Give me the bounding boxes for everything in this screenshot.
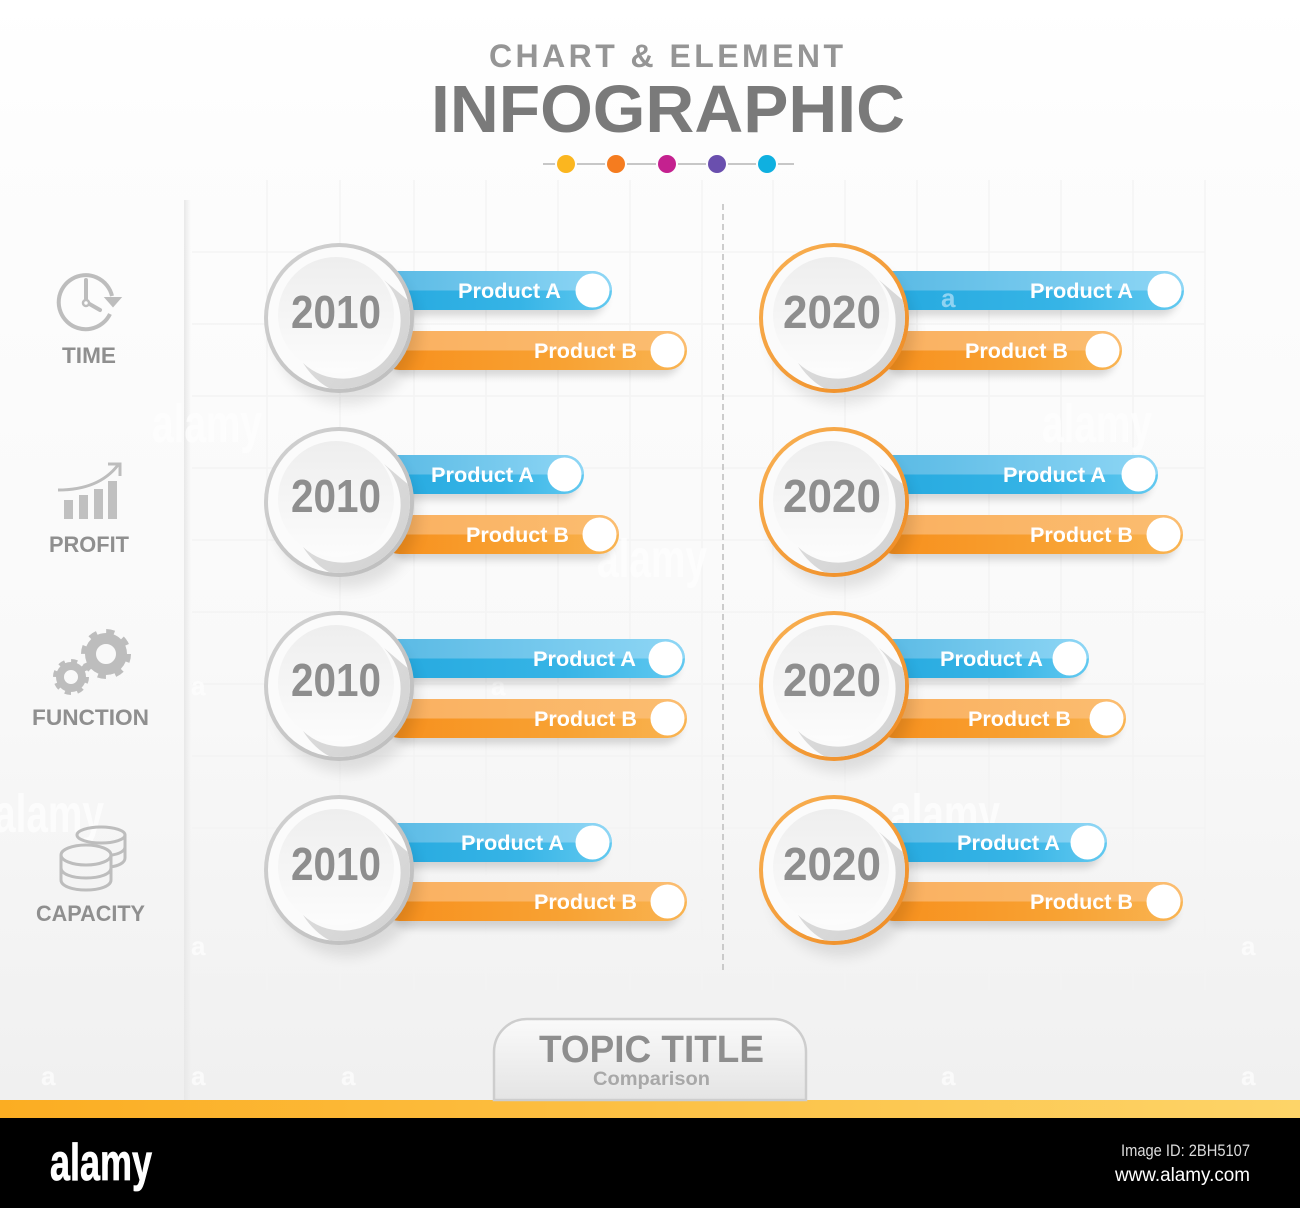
footer band: alamy [50, 1134, 152, 1192]
bar: product B: Product B [965, 340, 1068, 363]
bar: product A [380, 455, 584, 500]
bar: product B: Product B [534, 891, 637, 914]
bar: product A [875, 639, 1089, 684]
topic title tab [494, 1019, 806, 1100]
title: chart and element: CHART & ELEMENT [489, 38, 843, 74]
bar: product A [380, 639, 685, 684]
bar: product B [380, 331, 687, 376]
year badge: 2020 [783, 470, 881, 522]
panel: 2010 row 4 [264, 795, 687, 965]
year badge: 2020 [783, 286, 881, 338]
footer band: Image ID: 2BH5107 [1121, 1141, 1250, 1160]
bar: product B [380, 882, 687, 928]
year badge: 2020 [783, 838, 881, 890]
year badge [264, 611, 423, 781]
text: a [491, 671, 506, 701]
bar: product A [875, 271, 1184, 316]
text: a [941, 1061, 956, 1091]
icon: gears [56, 632, 128, 692]
text: a [41, 1061, 56, 1091]
bottom orange strip [0, 1100, 1300, 1118]
label: profit: PROFIT [49, 532, 130, 557]
icon: coins [61, 827, 125, 890]
bar: product A: Product A [431, 464, 534, 487]
panel: 2020 row 1 [759, 243, 1184, 413]
text: alamy [890, 784, 1000, 844]
year badge [264, 243, 423, 413]
bar: product B: Product B [466, 524, 569, 547]
footer band: www.alamy.com [1114, 1165, 1250, 1186]
bar: product A [380, 271, 612, 316]
bar: product B [380, 699, 687, 744]
year badge [759, 795, 918, 965]
bar: product A: Product A [957, 832, 1060, 855]
colored dots divider [543, 153, 794, 175]
year badge [264, 427, 423, 597]
bar: product B: Product B [1030, 891, 1133, 914]
panel: 2010 row 1 [264, 243, 687, 413]
year badge: 2010 [291, 654, 381, 706]
title: infographic: INFOGRAPHIC [431, 72, 905, 147]
panel: 2010 row 2 [264, 427, 619, 597]
text: a [1241, 1061, 1256, 1091]
bar: product A: Product A [533, 648, 636, 671]
panel: 2020 row 3 [759, 611, 1126, 781]
year badge: 2010 [291, 470, 381, 522]
text: alamy [1042, 394, 1152, 454]
year badge: 2010 [291, 838, 381, 890]
bar: product B [875, 699, 1126, 744]
text: a [191, 931, 206, 961]
text: a [1241, 931, 1256, 961]
label: function: FUNCTION [32, 705, 149, 730]
topic title tab: TOPIC TITLE [539, 1029, 764, 1071]
bar: product B [875, 515, 1183, 560]
bar: product B [875, 331, 1122, 376]
panel: 2010 row 3 [264, 611, 687, 781]
bar: product A: a [941, 283, 956, 313]
bar: product A: Product A [1030, 280, 1133, 303]
footer band [0, 1118, 1300, 1208]
bar: product A: Product A [461, 832, 564, 855]
bar: product A [380, 823, 612, 868]
text: a [341, 1061, 356, 1091]
label: capacity: CAPACITY [36, 901, 145, 926]
year badge [759, 427, 918, 597]
bar: product A: Product A [1003, 464, 1106, 487]
bar: product A [875, 455, 1158, 500]
bar: product B [875, 882, 1183, 928]
year badge [759, 243, 918, 413]
bar: product B [380, 515, 619, 560]
bar: product A [875, 823, 1107, 868]
bar: product B: Product B [968, 708, 1071, 731]
text: alamy [152, 394, 262, 454]
icon: clock [59, 275, 120, 329]
topic title tab: Comparison [593, 1069, 710, 1090]
text: a [191, 1061, 206, 1091]
year badge: 2010 [291, 286, 381, 338]
bar: product A: Product A [940, 648, 1043, 671]
panel: 2020 row 4 [759, 795, 1183, 965]
bar: product B: Product B [534, 708, 637, 731]
icon: profit chart [58, 464, 120, 519]
year badge [264, 795, 423, 965]
bar: product A: Product A [458, 280, 561, 303]
panel: 2020 row 2 [759, 427, 1183, 597]
left sidebar edge [184, 200, 191, 1100]
text: alamy [597, 529, 707, 589]
year badge [759, 611, 918, 781]
bar: product B: Product B [1030, 524, 1133, 547]
text: a [191, 671, 206, 701]
year badge: 2020 [783, 654, 881, 706]
label: time: TIME [62, 343, 116, 368]
bar: product B: Product B [534, 340, 637, 363]
